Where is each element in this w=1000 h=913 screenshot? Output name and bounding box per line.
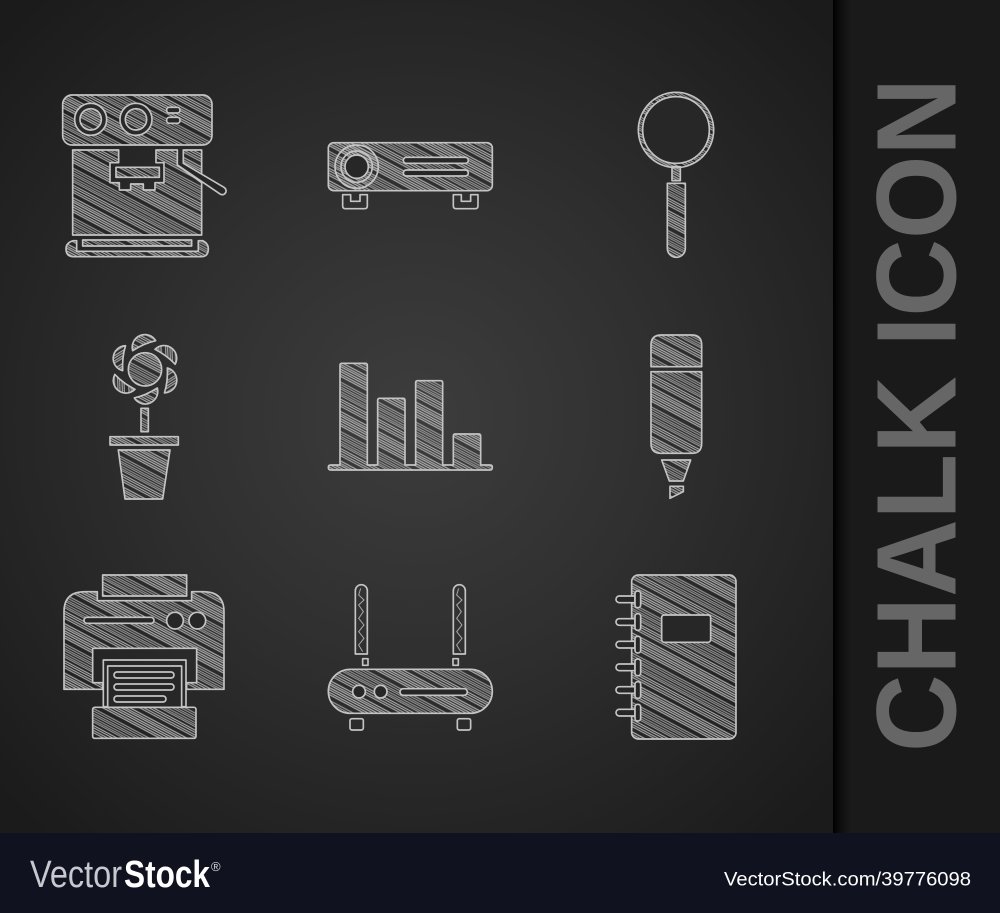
chalkboard background xyxy=(0,0,833,833)
logo: VectorStock: Vector xyxy=(30,854,122,896)
panel: right title strip xyxy=(833,0,1000,833)
title: CHALK ICON: CHALK ICON xyxy=(854,78,980,752)
icon: spiral notebook xyxy=(616,575,736,739)
logo: VectorStock: Stock xyxy=(124,854,211,896)
icon: printer xyxy=(64,575,224,738)
image id text: VectorStock.com/39776098 xyxy=(724,870,971,890)
panel: footer bar xyxy=(0,833,1000,913)
logo: VectorStock: ® xyxy=(211,859,221,874)
icon: highlighter xyxy=(651,335,702,498)
icon: coffee machine xyxy=(63,95,226,257)
icon: wifi router xyxy=(328,585,492,730)
icon: bar chart xyxy=(328,363,492,470)
icon: flower in pot xyxy=(109,335,181,499)
logo: VectorStock xyxy=(30,854,221,896)
icon: projector xyxy=(328,143,492,209)
icon: magnifier xyxy=(638,92,714,257)
